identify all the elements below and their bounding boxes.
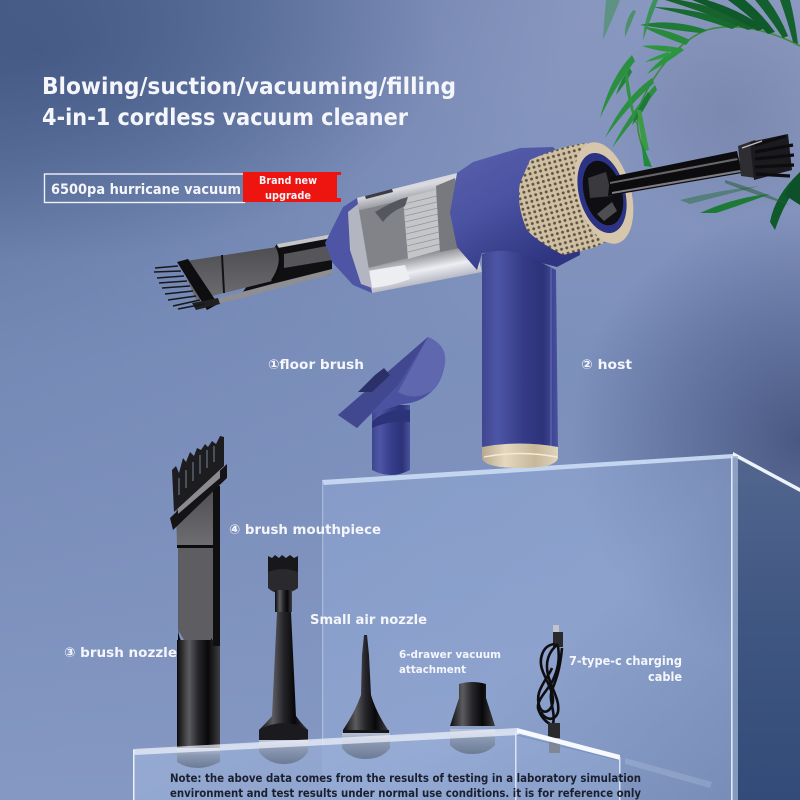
blue motor housing — [450, 147, 580, 270]
title: Blowing/suction/vacuuming/filling — [42, 74, 456, 100]
accessory: long brush nozzle — [170, 436, 227, 768]
accessory: type-c charging cable — [538, 625, 563, 753]
right round-brush tube — [608, 134, 794, 196]
left tube and flat nozzle — [154, 234, 332, 310]
accessory: round brush mouthpiece — [259, 555, 308, 764]
handle — [482, 251, 558, 468]
badge: brand new upgrade ribbon: upgrade — [265, 190, 311, 202]
accessory: small air nozzle — [342, 635, 390, 759]
accessory: floor brush — [338, 337, 445, 475]
accessory: drawer vacuum attachment — [450, 682, 495, 754]
badge: 6500pa hurricane vacuum — [44, 174, 244, 202]
vacuum cleaner: main unit — [154, 134, 794, 468]
footnote: environment and test results under normal use conditions. it is for reference only — [170, 786, 641, 800]
label: type-c charging cable — [569, 653, 682, 684]
label: drawer vacuum attachment — [399, 648, 501, 676]
plant: palm leaves — [600, 0, 800, 230]
label: floor brush: ①floor brush — [268, 357, 364, 373]
label: host: ② host — [581, 357, 633, 373]
label: small air nozzle: Small air nozzle — [310, 612, 427, 628]
label: type-c charging cable: cable — [648, 669, 682, 684]
footnote: Note: the above data comes from the results of testing in a laboratory simulation — [170, 771, 641, 785]
lower glass box edges — [133, 728, 712, 800]
badge: brand new upgrade ribbon: Brand new — [259, 175, 317, 187]
footnote — [170, 771, 641, 800]
badge: brand new upgrade ribbon — [243, 172, 341, 202]
lower glass box body — [133, 730, 620, 800]
upper glass display box — [322, 452, 800, 800]
label: type-c charging cable: 7-type-c charging — [569, 653, 682, 668]
label: drawer vacuum attachment: attachment — [399, 663, 466, 676]
badge: 6500pa hurricane vacuum: 6500pa hurricane vacuum — [51, 182, 241, 198]
label: drawer vacuum attachment: 6-drawer vacuum — [399, 648, 501, 661]
gold perforated collar — [519, 136, 644, 255]
title — [42, 74, 456, 131]
label: brush nozzle: ③ brush nozzle — [64, 645, 177, 661]
label: brush mouthpiece: ④ brush mouthpiece — [229, 522, 381, 538]
title: 4-in-1 cordless vacuum cleaner — [42, 105, 409, 131]
transparent dust cup — [325, 173, 482, 293]
